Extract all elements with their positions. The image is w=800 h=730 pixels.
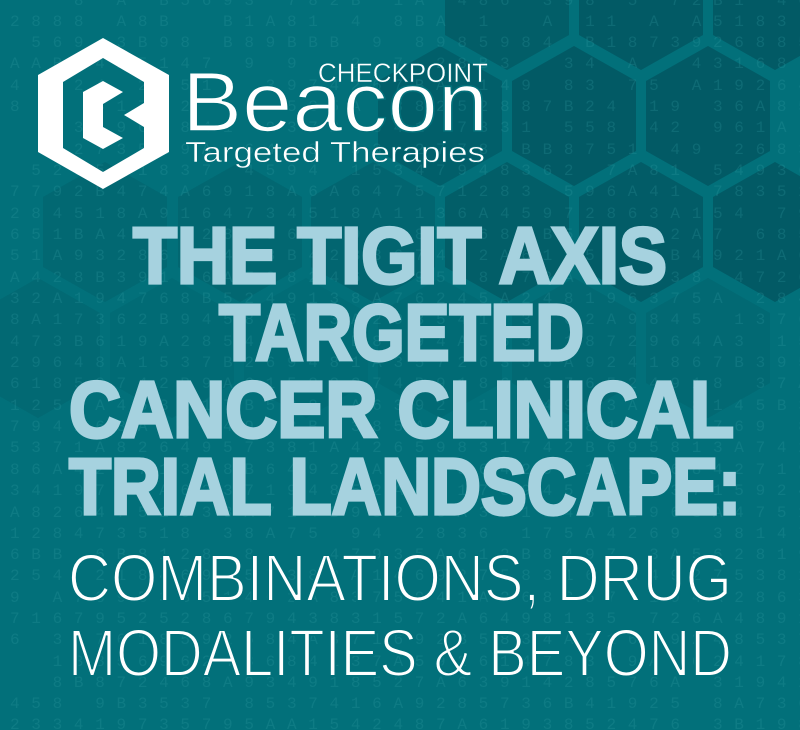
wordmark: CHECKPOINT: CHECKPOINT	[318, 58, 488, 88]
wordmark: Targeted Therapies: Targeted Therapies	[185, 137, 485, 169]
icon: hexagon B mark	[38, 38, 169, 189]
title	[69, 211, 741, 531]
title line 3: CANCER CLINICAL	[69, 365, 734, 454]
title line 2: TARGETED	[219, 288, 584, 377]
logo: Checkpoint Beacon Targeted Therapies	[38, 38, 488, 189]
title line 1: THE TIGIT AXIS	[133, 211, 667, 300]
subtitle line 1: COMBINATIONS, DRUG	[68, 541, 732, 616]
wordmark: Beacon: Beacon	[182, 55, 488, 149]
hexagon pattern	[0, 0, 800, 418]
subtitle	[68, 541, 732, 691]
